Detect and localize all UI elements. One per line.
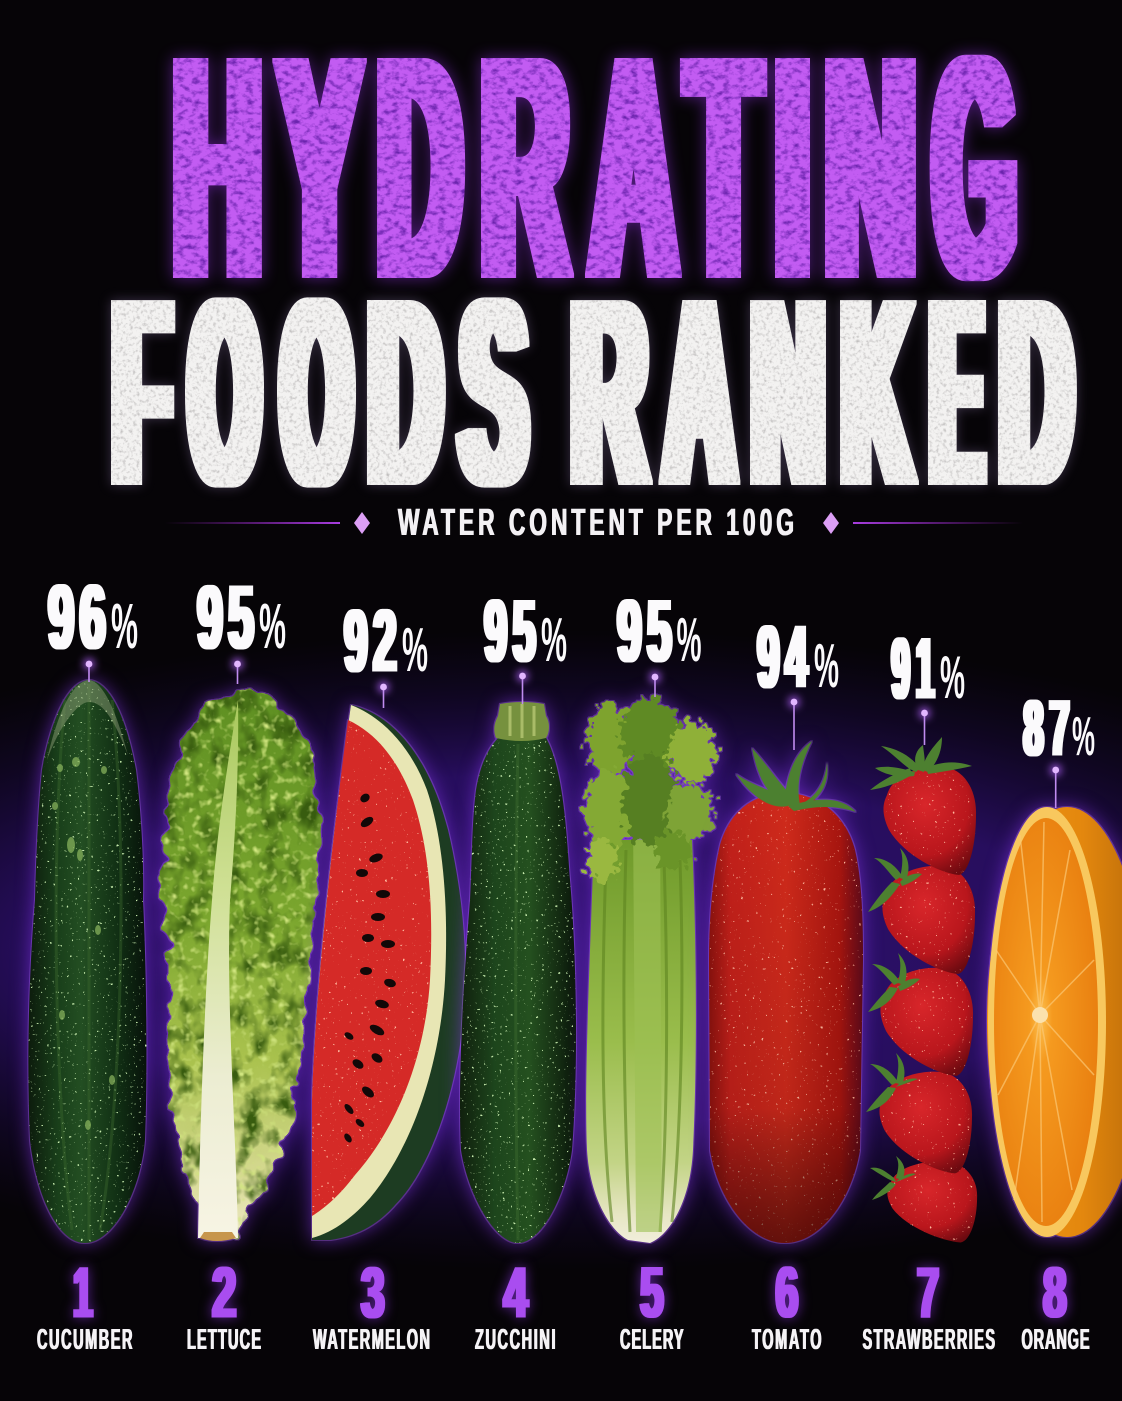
rank 1: 1 bbox=[73, 1252, 93, 1332]
title: FOODS RANKED: O bbox=[190, 246, 259, 539]
name: lettuce: LETTUCE bbox=[187, 1322, 261, 1355]
food 6: tomato bbox=[709, 741, 863, 1243]
title: HYDRATING: I bbox=[776, 0, 809, 344]
strawberry leaves bbox=[866, 737, 972, 1200]
title: FOODS RANKED bbox=[114, 245, 1072, 540]
value: strawberries 91% bbox=[892, 620, 965, 717]
food 4: zucchini bbox=[460, 702, 576, 1243]
title: HYDRATING: Y bbox=[279, 0, 360, 343]
strawberry 1 bbox=[883, 767, 976, 875]
value: tomato 94%: 94 bbox=[757, 608, 807, 706]
rank 6: 6 bbox=[776, 1253, 798, 1333]
title: FOODS RANKED: O bbox=[282, 246, 351, 539]
value: watermelon 92%: 92 bbox=[344, 592, 397, 690]
percentage values: % bbox=[541, 606, 567, 675]
name: tomato: TOMATO bbox=[752, 1322, 822, 1355]
title: FOODS RANKED: F bbox=[114, 245, 170, 539]
value: celery 95%: 95 bbox=[617, 581, 672, 680]
title: FOODS RANKED: N bbox=[752, 246, 824, 540]
name: watermelon: WATERMELON bbox=[313, 1322, 430, 1355]
value: lettuce 95%: 95 bbox=[197, 567, 254, 668]
subtitle row: WATER CONTENT PER 100G bbox=[398, 501, 794, 543]
title: FOODS RANKED: R bbox=[572, 246, 646, 540]
value: lettuce 95% bbox=[197, 567, 286, 668]
title: FOODS RANKED: D bbox=[1000, 246, 1072, 540]
percentage values: % bbox=[940, 644, 965, 711]
strawberry 5 bbox=[887, 1161, 977, 1242]
rank 4: 4 bbox=[504, 1253, 528, 1333]
value: tomato 94% bbox=[757, 608, 839, 706]
rank 5: 5 bbox=[640, 1254, 664, 1333]
connector pins bbox=[83, 658, 1062, 808]
title: HYDRATING: D bbox=[378, 0, 461, 344]
value: cucumber 96%: 96 bbox=[48, 566, 106, 668]
strawberry 3 bbox=[880, 968, 973, 1076]
name: orange: ORANGE bbox=[1022, 1322, 1090, 1355]
value: orange 87% bbox=[1024, 684, 1095, 772]
value: strawberries 91%: 91 bbox=[892, 620, 934, 717]
purple glow behind foods bbox=[0, 630, 1122, 1270]
rank 7: 7 bbox=[917, 1254, 939, 1333]
food names bbox=[37, 1322, 1090, 1355]
title: HYDRATING: H bbox=[174, 0, 261, 343]
name: strawberries: STRAWBERRIES bbox=[862, 1322, 995, 1355]
value: zucchini 95%: 95 bbox=[484, 581, 536, 680]
food 3: watermelon bbox=[312, 705, 465, 1240]
food 7: strawberries bbox=[866, 737, 977, 1242]
value: celery 95% bbox=[617, 581, 702, 680]
foods row bbox=[28, 680, 1122, 1243]
food 2: lettuce bbox=[163, 691, 319, 1241]
subtitle row bbox=[165, 501, 1023, 543]
title: FOODS RANKED: A bbox=[665, 245, 734, 539]
title: HYDRATING: A bbox=[591, 0, 676, 344]
food 8: orange bbox=[987, 807, 1122, 1237]
title: HYDRATING: R bbox=[482, 0, 568, 343]
title: HYDRATING: N bbox=[826, 0, 915, 343]
percentage values: % bbox=[814, 632, 839, 701]
food 1: cucumber bbox=[28, 680, 146, 1243]
title: FOODS RANKED: K bbox=[843, 245, 911, 539]
title: HYDRATING: T bbox=[688, 0, 760, 344]
value: cucumber 96% bbox=[48, 566, 138, 668]
name: celery: CELERY bbox=[620, 1322, 683, 1355]
value: watermelon 92% bbox=[344, 592, 428, 690]
rank 2: 2 bbox=[212, 1253, 236, 1333]
percentage values: % bbox=[676, 606, 702, 675]
infographic canvas: % bbox=[1072, 705, 1095, 767]
food 5: celery bbox=[584, 699, 716, 1243]
percentage values: % bbox=[259, 590, 286, 662]
rank numbers bbox=[73, 1252, 1067, 1333]
title: FOODS RANKED: D bbox=[369, 246, 441, 540]
percentage values: % bbox=[111, 590, 138, 662]
value: zucchini 95% bbox=[484, 581, 567, 680]
tomato calyx bbox=[736, 741, 856, 812]
percentage values bbox=[48, 566, 1095, 772]
percentage values: % bbox=[402, 616, 428, 685]
title: HYDRATING: G bbox=[934, 0, 1015, 343]
title: FOODS RANKED: E bbox=[932, 245, 981, 539]
title: HYDRATING bbox=[174, 0, 1015, 344]
strawberry 4 bbox=[879, 1072, 972, 1173]
value: orange 87%: 87 bbox=[1024, 684, 1069, 772]
name: zucchini: ZUCCHINI bbox=[475, 1322, 556, 1355]
rank 8: 8 bbox=[1043, 1254, 1067, 1333]
strawberry 2 bbox=[882, 866, 975, 974]
rank 3: 3 bbox=[361, 1254, 385, 1333]
title: FOODS RANKED: S bbox=[461, 246, 526, 540]
name: cucumber: CUCUMBER bbox=[37, 1322, 133, 1355]
